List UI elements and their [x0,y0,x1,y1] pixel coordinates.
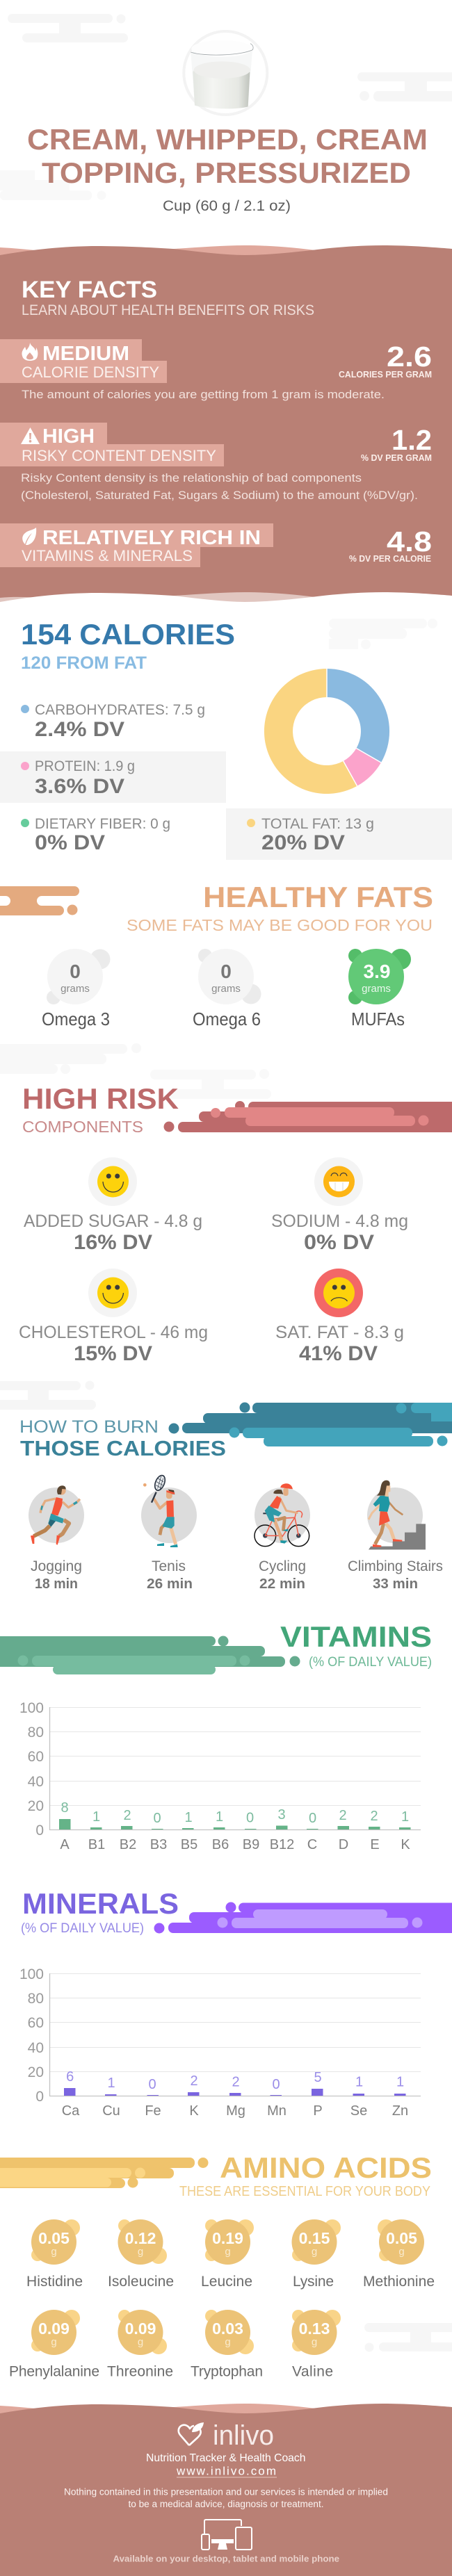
risky content density: (Cholesterol, Saturated Fat, Sugars & Sodium) to the amount (%DV/gr). [21,489,418,502]
cholesterol [19,1269,208,1365]
title: CREAM, WHIPPED, CREAM [27,123,428,156]
added sugar: ADDED SUGAR - 4.8 g [24,1212,202,1231]
risky content density: Risky Content density is the relationship of bad components [21,471,362,484]
heading: 154 CALORIES [21,618,235,651]
amino acid: valine: 0.13 [299,2320,330,2338]
legend: protein: 3.6% DV [35,775,124,798]
activity: climbing stairs: 33 min [373,1576,418,1592]
activity: jogging: Jogging [31,1558,82,1574]
bar chart: vitamins: B12 [270,1837,294,1852]
legend: protein: PROTEIN: 1.9 g [35,758,135,774]
bar chart: vitamins: D [339,1837,348,1852]
omega 6: Omega 6 [193,1009,261,1029]
omega 3: Omega 3 [42,1009,110,1029]
activity: cycling [255,1483,310,1592]
amino acid: threonine: g [138,2336,143,2348]
omega 6: 0 [220,961,232,982]
vitamins and minerals: VITAMINS & MINERALS [22,547,193,564]
bar chart: vitamins: 1 [184,1810,193,1825]
heading: VITAMINS [280,1620,432,1653]
logo: inlivo [213,2420,274,2451]
title [27,123,428,189]
legend: total fat [247,816,374,854]
bar chart: minerals: P [313,2103,323,2119]
MUFAs: grams [362,983,391,995]
title: TOPPING, PRESSURIZED [42,156,411,189]
sodium [271,1157,408,1254]
bar chart: vitamins: B5 [181,1837,197,1852]
saturated fat [275,1269,404,1365]
vitamins and minerals: RELATIVELY RICH IN [42,527,261,549]
heading: SOME FATS MAY BE GOOD FOR YOU [127,916,433,934]
risky content density: % DV PER GRAM [361,453,432,463]
bar chart: minerals: 6 [66,2069,74,2085]
omega 3: 0 [70,961,81,982]
sodium: SODIUM - 4.8 mg [271,1212,408,1231]
bar chart: vitamins [19,1700,421,1852]
bar chart: vitamins: 0 [309,1811,316,1826]
icon: glass of cream [184,31,267,115]
bar chart: minerals: 20 [28,2064,44,2080]
cholesterol: CHOLESTEROL - 46 mg [19,1323,208,1342]
heading [179,2151,432,2199]
bar chart: minerals: Fe [145,2103,161,2119]
amino acid: histidine [26,2219,83,2290]
vitamins and minerals: 4.8 [387,525,432,557]
amino acid: isoleucine [108,2219,174,2290]
disclaimer [64,2487,388,2509]
amino acid: phenylalanine: g [51,2336,57,2348]
bar chart: vitamins: 1 [401,1809,409,1825]
amino acid: tryptophan [191,2310,263,2380]
bar chart: vitamins: 3 [277,1807,286,1823]
amino acid: leucine [201,2219,254,2290]
heading: COMPONENTS [22,1118,143,1136]
amino acid: tryptophan: 0.03 [212,2320,243,2338]
legend: carbohydrates [21,702,205,741]
panel: minerals [19,1887,452,2119]
activity: jogging [29,1485,84,1592]
omega 3: grams [60,983,90,995]
amino acid: phenylalanine: Phenylalanine [9,2363,99,2380]
activity: cycling: Cycling [259,1558,306,1574]
calorie density: CALORIES PER GRAM [339,369,432,380]
heading: KEY FACTS [22,277,157,303]
donut chart [264,669,389,794]
bar chart: minerals: Cu [102,2103,120,2119]
bar chart: vitamins: 1 [216,1809,223,1825]
bar chart: minerals [19,1966,421,2119]
cloud decoration [168,1403,452,1446]
amino acid: valine [292,2310,341,2380]
heading: AMINO ACIDS [220,2151,432,2184]
panel: burn calories [19,1403,452,1592]
activity: tennis [141,1474,197,1592]
icon: heart with leaf [179,2422,204,2445]
legend: protein [21,758,135,798]
bar chart: vitamins: B1 [88,1837,105,1852]
legend background [0,751,452,860]
bar chart: minerals: Mg [226,2103,245,2119]
disclaimer: Nothing contained in this presentation and our services is intended or implied [64,2487,388,2497]
omega 3 [42,949,110,1029]
bar chart: vitamins: 0 [35,1823,44,1839]
tagline and link [146,2452,306,2477]
bar chart: minerals: Se [350,2103,367,2119]
amino acid: histidine: Histidine [26,2274,83,2290]
bar chart: minerals: K [189,2103,199,2119]
amino acid: methionine: Methionine [363,2274,435,2290]
bar chart: minerals: 40 [28,2040,44,2056]
amino acid: lysine [292,2219,341,2290]
amino acid: isoleucine: g [138,2246,143,2258]
MUFAs: MUFAs [351,1009,405,1029]
bar chart: minerals: Zn [392,2103,408,2119]
cloud decoration [0,1636,300,1674]
activity: cycling: 22 min [259,1576,305,1592]
heading [22,1082,179,1136]
bar chart: vitamins: 2 [370,1809,378,1824]
legend: total fat: TOTAL FAT: 13 g [261,816,374,832]
panel: vitamins [0,1620,432,1852]
risky content density: 1.2 [392,424,432,456]
bar chart: vitamins: B2 [120,1837,136,1852]
legend: carbohydrates: CARBOHYDRATES: 7.5 g [35,702,205,718]
panel: amino acids [0,2151,435,2380]
amino acid: lysine: g [312,2246,317,2258]
cloud decoration [164,1101,452,1132]
cholesterol: 15% DV [74,1342,152,1365]
bar chart: minerals: 2 [190,2073,198,2089]
amino acid: valine: Valine [292,2363,333,2380]
amino acid: leucine: 0.19 [212,2229,243,2247]
bar chart: vitamins: 0 [153,1811,161,1826]
icon: warning triangle [21,427,40,444]
bar chart: minerals: 1 [107,2076,115,2091]
legend: total fat: 20% DV [261,831,345,854]
heading: HOW TO BURN [19,1417,159,1437]
legend: carbohydrates: 2.4% DV [35,718,124,741]
amino acid: threonine: 0.09 [125,2320,156,2338]
added sugar [24,1157,202,1254]
amino acid: phenylalanine: 0.09 [38,2320,70,2338]
amino acid: lysine: Lysine [293,2274,334,2290]
serving size: Cup (60 g / 2.1 oz) [163,198,291,214]
risky content density [0,423,432,502]
heading: LEARN ABOUT HEALTH BENEFITS OR RISKS [22,302,314,318]
bar chart: minerals: 60 [28,2015,44,2031]
vitamins and minerals [0,523,432,567]
cloud decoration [154,1902,452,1934]
bar chart: vitamins: 0 [246,1810,254,1825]
heading: HEALTHY FATS [203,881,433,913]
activity: jogging: 18 min [35,1576,78,1592]
availability note: Available on your desktop, tablet and mobile phone [113,2554,339,2563]
bar chart: minerals: 0 [148,2077,156,2092]
amino acid: isoleucine: Isoleucine [108,2274,174,2290]
amino acid: threonine [107,2310,173,2380]
bar chart: vitamins: E [370,1837,380,1852]
amino acid: histidine: g [51,2246,57,2258]
bar chart: minerals: 100 [19,1966,44,1982]
bar chart: minerals: 5 [314,2070,322,2085]
legend: dietary fiber [21,816,170,854]
omega 6: grams [211,983,241,995]
amino acid: tryptophan: Tryptophan [191,2363,263,2380]
amino acid: histidine: 0.05 [38,2229,70,2247]
bar chart: vitamins: 20 [28,1798,44,1814]
heading [22,277,314,318]
icon: leaf [22,528,36,545]
activity: tennis: 26 min [147,1576,193,1592]
activity: climbing stairs: Climbing Stairs [348,1558,443,1574]
heading: THESE ARE ESSENTIAL FOR YOUR BODY [179,2184,430,2199]
heading: HIGH RISK [22,1082,179,1115]
heading [280,1620,432,1670]
bar chart: vitamins: 2 [123,1808,131,1823]
saturated fat: 41% DV [299,1342,378,1365]
amino acid: threonine: Threonine [107,2363,173,2380]
bar chart: vitamins: C [307,1837,317,1852]
bar chart: minerals: 1 [355,2074,363,2089]
calorie density: The amount of calories you are getting from 1 gram is moderate. [22,388,385,401]
risky content density: RISKY CONTENT DENSITY [22,447,216,464]
amino acid: phenylalanine [9,2310,99,2380]
amino acid: isoleucine: 0.12 [125,2229,156,2247]
activity: tennis: Tenis [152,1558,186,1574]
risky content density: HIGH [42,425,95,448]
calorie density [0,339,432,401]
panel: key facts [0,245,452,615]
added sugar: 16% DV [74,1231,152,1254]
heading [127,881,433,934]
amino acid: methionine [363,2219,435,2290]
bar chart: minerals: 2 [232,2074,240,2089]
panel: high risk components [19,1082,452,1365]
MUFAs: 3.9 [364,961,390,982]
heading: 120 FROM FAT [21,653,147,673]
tagline and link: www.inlivo.com [176,2465,276,2477]
bar chart: vitamins: B6 [212,1837,229,1852]
MUFAs [348,949,411,1029]
bar chart: vitamins: 2 [339,1808,347,1823]
bar chart: minerals: 80 [28,1991,44,2007]
heading: THOSE CALORIES [20,1436,226,1460]
bar chart: vitamins: B3 [150,1837,167,1852]
tagline and link: Nutrition Tracker & Health Coach [146,2452,306,2464]
amino acid: tryptophan: g [225,2336,231,2348]
bar chart: vitamins: K [401,1837,410,1852]
bar chart: minerals: 1 [396,2074,404,2089]
heading [21,618,235,673]
amino acid: valine: g [312,2336,317,2348]
bar chart: vitamins: 100 [19,1700,44,1716]
header: product image and title [27,31,428,214]
bar chart: vitamins: B9 [243,1837,259,1852]
saturated fat: SAT. FAT - 8.3 g [275,1323,404,1342]
bar chart: vitamins: 80 [28,1725,44,1741]
bar chart: minerals: 0 [272,2077,280,2092]
panel: calories [0,618,452,860]
bar chart: vitamins: 1 [92,1809,100,1825]
amino acid: leucine: Leucine [201,2274,252,2290]
legend: dietary fiber: DIETARY FIBER: 0 g [35,816,170,832]
panel: healthy fats [0,881,433,1029]
calorie density: MEDIUM [42,343,129,365]
icon: devices [202,2520,252,2550]
heading: MINERALS [22,1887,179,1920]
bar chart: vitamins: 8 [60,1800,69,1816]
bar chart: minerals: Mn [267,2103,286,2119]
bar chart: vitamins: A [60,1837,70,1852]
legend: dietary fiber: 0% DV [35,831,105,854]
amino acid: methionine: g [398,2246,405,2258]
heading [21,1887,179,1936]
disclaimer: to be a medical advice, diagnosis or treatment. [128,2499,324,2509]
heading: (% OF DAILY VALUE) [309,1655,432,1670]
cloud decoration [0,886,79,915]
amino acid: leucine: g [225,2246,231,2258]
logo [179,2420,274,2451]
bar chart: vitamins: 60 [28,1749,44,1765]
heading: (% OF DAILY VALUE) [21,1921,144,1936]
heading [19,1417,226,1460]
cloud decoration [0,2158,209,2188]
bar chart: vitamins: 40 [28,1774,44,1790]
bar chart: minerals: Ca [62,2103,80,2119]
calorie density: 2.6 [387,341,432,373]
amino acid: methionine: 0.05 [386,2229,417,2247]
panel: footer [0,2404,452,2576]
sodium: 0% DV [304,1231,374,1254]
amino acid: lysine: 0.15 [299,2229,330,2247]
icon: flame [22,343,38,361]
bar chart: minerals: 0 [35,2089,44,2105]
activity: climbing stairs [348,1481,443,1592]
vitamins and minerals: % DV PER CALORIE [349,553,431,564]
calorie density: CALORIE DENSITY [22,364,159,381]
omega 6 [193,949,261,1029]
